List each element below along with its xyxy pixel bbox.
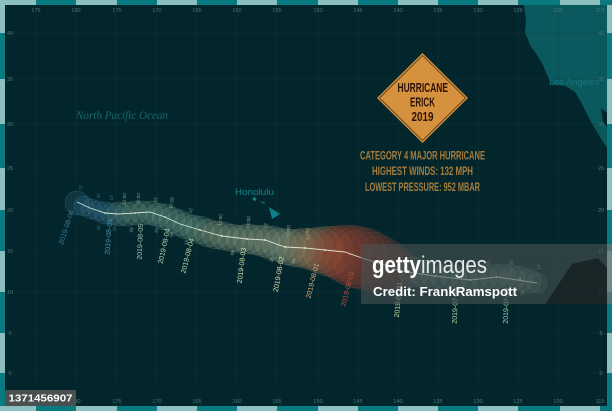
graticule labels: 10 <box>598 290 604 296</box>
image id tag: 1371456907 <box>8 392 73 404</box>
date labels: 2019-07-31 <box>394 281 404 318</box>
graticule labels: 120 <box>553 8 563 14</box>
graticule labels: 180 <box>71 399 81 405</box>
hour tick labels: 18 <box>112 226 117 232</box>
date labels: 2019-08-02 <box>273 256 286 293</box>
graticule labels: 35 <box>7 77 13 83</box>
graticule labels: 40 <box>7 31 13 37</box>
graticule labels: 150 <box>313 399 323 405</box>
hour tick labels: 12 <box>78 184 84 191</box>
graticule labels: 15 <box>7 249 13 255</box>
hour tick labels: 00:00 <box>286 224 292 237</box>
storm statistics text: CATEGORY 4 MAJOR HURRICANE <box>360 150 485 162</box>
graticule labels: 165 <box>192 8 202 14</box>
hour tick labels: 12 <box>187 207 194 214</box>
graticule labels: 135 <box>433 399 443 405</box>
date labels: 2019-08-04 <box>180 238 196 274</box>
road sign: hurricane title: 2019 <box>412 109 434 124</box>
storm size circles <box>65 191 547 293</box>
hour tick labels: 00:00 <box>168 196 175 209</box>
hour tick labels: 06 <box>520 290 525 296</box>
date labels: 2019-08-01 <box>305 263 321 299</box>
graticule labels: 5 <box>599 331 603 337</box>
road sign: hurricane title: HURRICANE <box>398 80 448 95</box>
hour tick labels: 06 <box>168 231 175 238</box>
graticule labels: 125 <box>513 399 523 405</box>
date labels: 2019-08-05 <box>105 219 114 255</box>
watermark: gettyimages: gettyimages <box>372 252 487 279</box>
graticule labels: 25 <box>598 166 604 172</box>
date labels: 2019-08-03 <box>237 247 248 284</box>
graticule labels: 135 <box>433 8 443 14</box>
graticule labels: 155 <box>272 399 282 405</box>
date labels: 2019-08-05 <box>137 224 145 260</box>
graticule labels: 15 <box>598 249 604 255</box>
graticule labels: 160 <box>232 8 242 14</box>
graticule labels: 30 <box>598 122 604 128</box>
hour tick labels: 12 <box>466 263 471 269</box>
storm statistics text: LOWEST PRESSURE: 952 MBAR <box>365 182 480 194</box>
graticule labels: 125 <box>513 8 523 14</box>
gulf of California <box>601 108 607 127</box>
graticule labels: 175 <box>112 8 122 14</box>
graticule labels: 145 <box>353 399 363 405</box>
graticule labels: 20 <box>598 208 604 214</box>
hour tick labels: 12:00 <box>305 227 311 240</box>
graticule labels: 140 <box>393 399 403 405</box>
land: California and Baja coast <box>524 5 607 148</box>
graticule labels: 0 <box>599 371 603 377</box>
graticule labels: 180 <box>71 8 81 14</box>
graticule labels: 130 <box>473 399 483 405</box>
hour tick labels: 00:00 <box>136 193 141 205</box>
hour tick labels: 00 <box>509 260 514 266</box>
graticule labels: 130 <box>473 8 483 14</box>
hour tick labels: 00 <box>96 192 102 199</box>
icon: Hawaiian islands <box>253 197 280 219</box>
graticule labels: 170 <box>152 8 162 14</box>
hour tick labels: 12 <box>153 197 158 203</box>
hour tick labels: 18 <box>154 227 160 234</box>
label: Los Angeles: Los Angeles <box>549 77 600 88</box>
date labels: 2019-08-01 <box>340 271 356 307</box>
graticule labels: 115 <box>596 8 604 14</box>
graticule labels: 175 <box>112 399 122 405</box>
graticule labels: 170 <box>152 399 162 405</box>
hour tick labels: 12 <box>263 222 269 229</box>
graticule labels: 160 <box>232 399 242 405</box>
graticule labels: 145 <box>353 8 363 14</box>
graticule labels: 10 <box>7 290 13 296</box>
hour tick labels: 12 <box>536 264 541 270</box>
hour tick labels: 00 <box>486 260 491 266</box>
storm statistics text: HIGHEST WINDS: 132 MPH <box>372 166 473 178</box>
watermark: credit: Credit: FrankRamspott <box>373 284 518 299</box>
hour tick labels: 00:00 <box>246 215 252 228</box>
hour tick labels: 12 <box>109 195 114 201</box>
label: Honolulu: Honolulu <box>235 187 274 197</box>
road sign: hurricane title <box>377 53 468 143</box>
graticule labels: 35 <box>598 77 604 83</box>
watermark band <box>361 244 612 304</box>
hour tick labels: 12:00 <box>122 193 127 205</box>
date labels: 2019-07-30 <box>452 288 460 324</box>
graticule labels: 155 <box>272 8 282 14</box>
graticule labels: 20 <box>7 208 13 214</box>
graticule labels: 40 <box>598 31 604 37</box>
track centre line <box>77 202 537 283</box>
graticule labels: 25 <box>7 166 13 172</box>
graticule labels: 115 <box>596 399 604 405</box>
hurricane track <box>58 184 547 324</box>
storm statistics text <box>360 150 485 194</box>
date labels <box>58 209 511 324</box>
hour tick labels: 18 <box>269 256 275 263</box>
hour tick labels: 06 <box>129 227 134 233</box>
hour tick labels: 18 <box>183 239 190 246</box>
hour tick labels: 06 <box>291 258 296 264</box>
track points <box>104 212 521 281</box>
label: North Pacific Ocean: North Pacific Ocean <box>75 110 168 122</box>
image id tag <box>5 390 76 406</box>
graticule labels: 5 <box>8 331 12 337</box>
hour tick labels: 06 <box>230 250 235 256</box>
graticule labels: 165 <box>192 399 202 405</box>
graticule labels: 150 <box>313 8 323 14</box>
graticule labels: 140 <box>393 8 403 14</box>
graticule labels: 175 <box>31 8 41 14</box>
hour tick labels <box>78 184 541 296</box>
graticule labels: 120 <box>553 399 563 405</box>
hour tick labels: 06 <box>96 224 102 231</box>
date labels: 2019-07-29 <box>503 288 511 324</box>
graticule labels: 0 <box>8 371 12 377</box>
date labels: 2019-08-06 <box>58 209 76 246</box>
hour tick labels: 12:00 <box>218 213 224 226</box>
date labels: 2019-08-04 <box>158 228 172 264</box>
road sign: hurricane title: ERICK <box>410 94 435 110</box>
graticule labels: 30 <box>7 122 13 128</box>
